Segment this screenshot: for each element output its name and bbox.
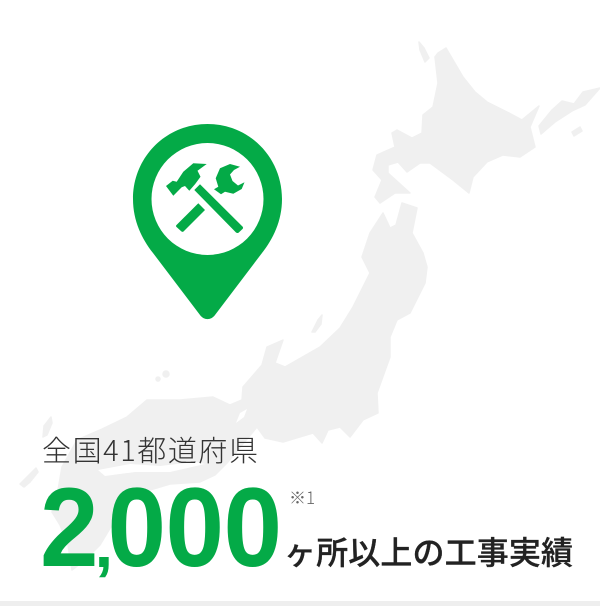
- heading: nationwide 41 prefectures: 全国41都道府県: [42, 428, 258, 470]
- lake Biwa and inland sea: [98, 409, 247, 476]
- large number 2,000: 0: [224, 466, 282, 591]
- icon: hammer: [166, 163, 243, 233]
- caption: construction record at over 2,000 locations: ヶ所以上の工事実績: [284, 528, 573, 574]
- large number 2,000: ,: [94, 507, 113, 582]
- footnote mark: ※1: [289, 484, 315, 509]
- large number 2,000: 0: [108, 466, 166, 591]
- large number 2,000: 0: [166, 466, 224, 591]
- large number 2,000: 2: [40, 466, 99, 591]
- large number 2,000: [40, 466, 282, 591]
- pin inner circle: [152, 143, 264, 255]
- bottom strip: [0, 601, 600, 606]
- location pin with tools icon: [133, 124, 282, 319]
- pin body: [133, 124, 282, 319]
- icon: wrench: [176, 164, 244, 232]
